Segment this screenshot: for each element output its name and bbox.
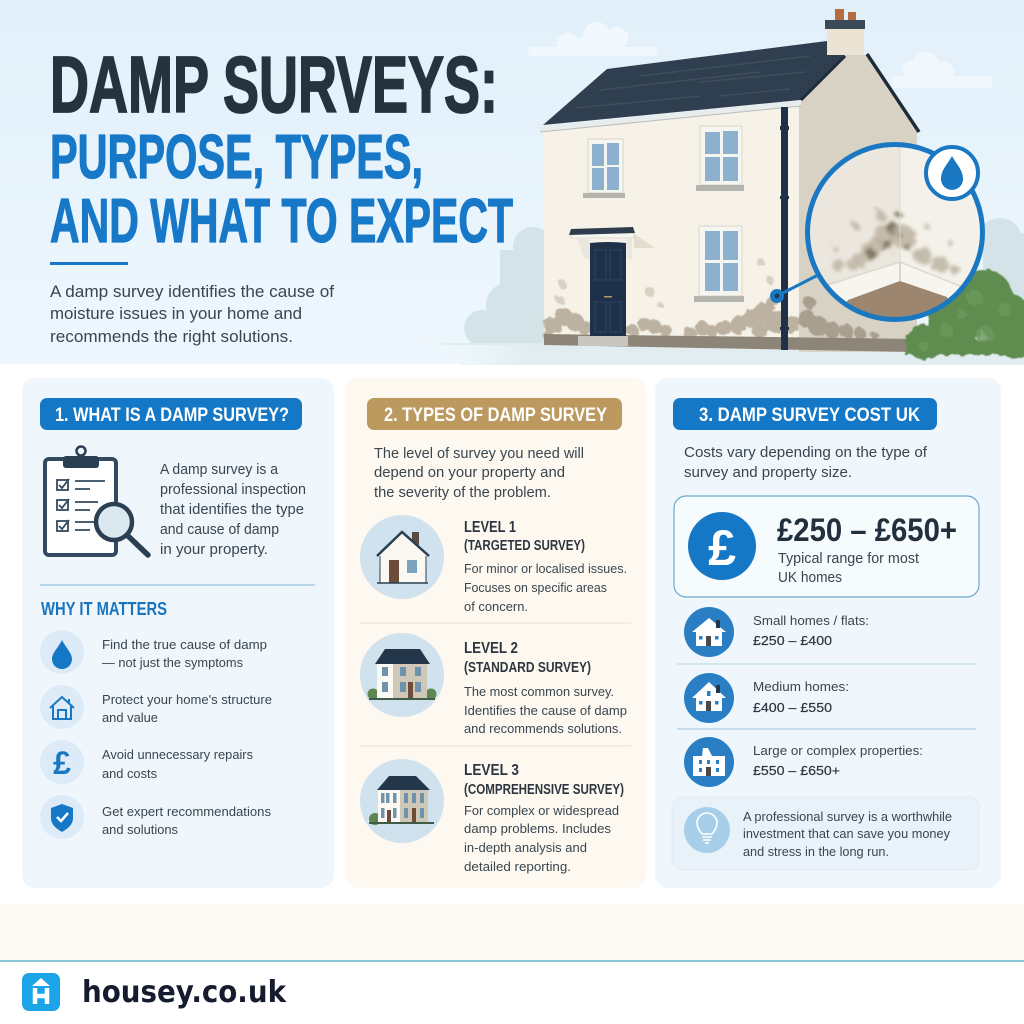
cream band: [0, 904, 1024, 960]
bullet: expert recommendations: Get expert recommendations: [102, 804, 271, 819]
bullet: expert recommendations: [40, 795, 271, 839]
cost row: large properties: Large or complex properties:: [753, 743, 923, 758]
bullet: true cause: Find the true cause of damp: [102, 637, 267, 652]
level 2: Identifies the cause of damp: [464, 703, 627, 718]
cost row: medium homes: Medium homes:: [753, 679, 849, 694]
icon: large house: [360, 759, 444, 843]
level 2: [360, 633, 627, 736]
intro text: recommends the right solutions.: [50, 328, 293, 346]
upper right window: [696, 126, 744, 191]
panel: damp survey cost: [655, 378, 1001, 888]
intro text: [374, 445, 584, 501]
level 3: in-depth analysis and: [464, 840, 587, 855]
level 2: and recommends solutions.: [464, 721, 622, 736]
icon: medium house: [360, 633, 444, 717]
cost row: small homes: £250 – £400: [753, 633, 832, 648]
title: PURPOSE, TYPES,: [50, 123, 423, 192]
tip box: [672, 797, 979, 870]
background bushes: [464, 218, 1024, 350]
description text: professional inspection: [160, 482, 306, 498]
inset: mould in room corner: [805, 142, 985, 322]
price range box: [674, 496, 979, 597]
bullet: protect home: and value: [102, 710, 158, 725]
intro text: survey and property size.: [684, 464, 852, 481]
cost row: large properties: £550 – £650+: [753, 763, 840, 778]
tip box: A professional survey is a worthwhile: [743, 810, 952, 824]
heading pill 1: [40, 398, 302, 430]
level 1: LEVEL 1: [464, 519, 516, 536]
footer brand name: housey.co.uk: [82, 975, 287, 1010]
bullet: protect home: [40, 685, 272, 729]
hero background: [0, 0, 1024, 365]
heading pill 3: 3. DAMP SURVEY COST UK: [699, 404, 920, 426]
intro text: Costs vary depending on the type of: [684, 444, 928, 461]
price range box: £: [708, 520, 736, 576]
tip box: investment that can save you money: [743, 827, 951, 841]
price range box: Typical range for most: [778, 551, 919, 567]
intro text: A damp survey identifies the cause of: [50, 283, 334, 301]
cost row: small homes: [684, 607, 869, 657]
bullet: avoid costs: £: [53, 745, 71, 781]
intro text: the severity of the problem.: [374, 484, 551, 501]
bullet: protect home: Protect your home's structure: [102, 692, 272, 707]
icon: water drop badge: [926, 147, 978, 199]
intro text: The level of survey you need will: [374, 445, 584, 462]
cost row: small homes: Small homes / flats:: [753, 613, 869, 628]
level 3: detailed reporting.: [464, 859, 571, 874]
heading pill 2: 2. TYPES OF DAMP SURVEY: [384, 404, 607, 426]
front wall: [544, 107, 799, 350]
icon: clipboard with magnifier: [45, 446, 148, 555]
why it matters heading: WHY IT MATTERS: [41, 599, 167, 619]
level 2: The most common survey.: [464, 684, 614, 699]
tip box: and stress in the long run.: [743, 845, 889, 859]
description text: in your property.: [160, 542, 268, 558]
roof: [537, 41, 919, 132]
downpipe: [780, 107, 789, 350]
footer logo: [22, 973, 60, 1011]
icon: lightbulb: [684, 807, 730, 853]
intro text: [684, 444, 928, 481]
description text: [160, 462, 306, 558]
price range box: UK homes: [778, 570, 842, 586]
level 2: LEVEL 2: [464, 640, 518, 657]
level 3: (COMPREHENSIVE SURVEY): [464, 782, 624, 798]
heading pill 2: [367, 398, 622, 430]
description text: that identifies the type: [160, 502, 304, 518]
bullet: avoid costs: [40, 740, 253, 784]
heading pill 1: 1. WHAT IS A DAMP SURVEY?: [55, 404, 289, 426]
bush: [905, 270, 1024, 360]
title: AND WHAT TO EXPECT: [50, 187, 513, 256]
callout connector: [770, 274, 820, 303]
level 3: For complex or widespread: [464, 803, 619, 818]
panel: types of damp survey: [345, 378, 646, 888]
level 1: [360, 515, 627, 614]
side wall: [799, 55, 917, 352]
bullet: true cause: — not just the symptoms: [102, 655, 243, 670]
title accent rule: [50, 262, 128, 265]
level 1: of concern.: [464, 599, 528, 614]
damp patches: [540, 258, 879, 340]
heading pill 3: [673, 398, 937, 430]
damp plinth: [544, 334, 917, 352]
description text: and cause of damp: [160, 522, 279, 538]
panel: what is a damp survey: [22, 378, 334, 888]
title: [50, 40, 513, 256]
description text: A damp survey is a: [160, 462, 279, 478]
cost row: medium homes: £400 – £550: [753, 700, 832, 715]
level 2: (STANDARD SURVEY): [464, 660, 591, 676]
icon: small house: [360, 515, 444, 599]
bullet: expert recommendations: and solutions: [102, 822, 178, 837]
cost row: large properties: [684, 737, 923, 787]
intro text: depend on your property and: [374, 464, 565, 481]
title: DAMP SURVEYS:: [50, 40, 498, 129]
house illustration: [537, 9, 1024, 360]
chimney: [825, 9, 865, 55]
intro text: moisture issues in your home and: [50, 305, 302, 323]
intro text: [50, 283, 334, 346]
bullet: avoid costs: and costs: [102, 766, 157, 781]
level 3: damp problems. Includes: [464, 821, 611, 836]
level 1: Focuses on specific areas: [464, 580, 607, 595]
level 1: For minor or localised issues.: [464, 561, 627, 576]
upper left window: [583, 139, 625, 198]
ground: [460, 344, 1024, 365]
bullet: avoid costs: Avoid unnecessary repairs: [102, 747, 253, 762]
price range box: £250 – £650+: [777, 512, 957, 548]
level 3: LEVEL 3: [464, 762, 519, 779]
cost row: medium homes: [684, 673, 849, 723]
bullet: true cause: [40, 630, 267, 674]
porch and door: [569, 227, 655, 346]
level 3: [360, 759, 624, 874]
clouds: [528, 22, 992, 88]
level 1: (TARGETED SURVEY): [464, 538, 585, 554]
lower window: [694, 226, 744, 302]
